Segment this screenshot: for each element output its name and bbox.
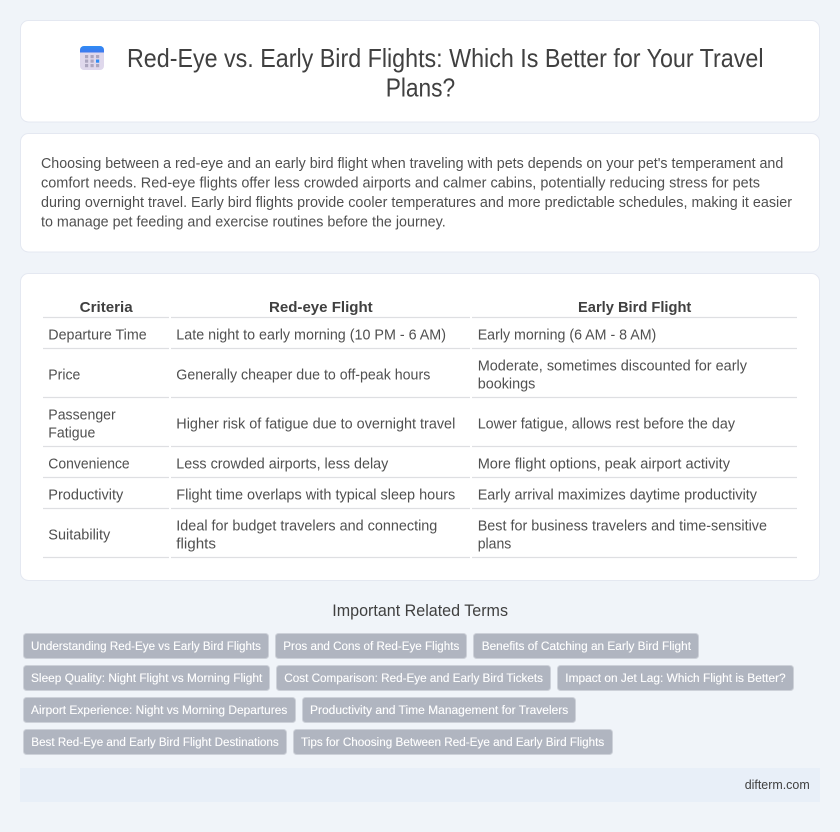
row: departure time: Late night to early morning (10 PM - 6 AM)	[176, 327, 446, 343]
row: passenger fatigue: Fatigue	[48, 425, 95, 441]
row: passenger fatigue	[48, 407, 736, 441]
row: productivity: Flight time overlaps with typical sleep hours	[176, 487, 455, 503]
row: productivity	[48, 487, 758, 503]
row: suitability: plans	[478, 536, 511, 552]
tag: Benefits of Catching an Early Bird Flight	[482, 639, 692, 653]
row: passenger fatigue: Higher risk of fatigue due to overnight travel	[176, 416, 455, 432]
row: suitability: Ideal for budget travelers and connecting	[176, 518, 437, 534]
table header: Early Bird Flight	[578, 299, 691, 316]
row: suitability	[48, 518, 767, 552]
text block: intro paragraph: to manage pet feeding and exercise routines before the journey.	[41, 215, 446, 231]
table header: Criteria	[80, 299, 133, 316]
row: price: Generally cheaper due to off-peak hours	[176, 367, 430, 383]
tag	[294, 730, 612, 754]
row: price: Moderate, sometimes discounted for early	[478, 358, 748, 374]
panel: comparison table	[20, 274, 820, 580]
text block: intro paragraph: during overnight travel. Early bird flights provide cooler temperatures and more predictable schedules, making it easier	[41, 195, 792, 211]
tag	[276, 634, 466, 658]
tag: Airport Experience: Night vs Morning Departures	[31, 703, 287, 717]
row: productivity: Productivity	[48, 487, 124, 503]
tag	[474, 634, 698, 658]
tag	[302, 698, 576, 722]
tag: Understanding Red-Eye vs Early Bird Flights	[31, 639, 261, 653]
row: suitability: Best for business travelers and time-sensitive	[478, 518, 767, 534]
tag	[24, 666, 270, 690]
text block: intro paragraph: Choosing between a red-eye and an early bird flight when traveling with pets depends on your pet's temperament and	[41, 156, 783, 172]
title: Plans?	[386, 74, 455, 102]
row: convenience: More flight options, peak airport activity	[478, 456, 731, 472]
row: convenience	[48, 456, 731, 472]
row: convenience: Convenience	[48, 456, 130, 472]
row: suitability: flights	[176, 536, 216, 552]
row: price: bookings	[478, 376, 535, 392]
tag	[24, 730, 286, 754]
row: suitability: Suitability	[48, 527, 111, 543]
tag: Impact on Jet Lag: Which Flight is Better?	[565, 671, 786, 685]
tag	[24, 634, 268, 658]
row: departure time: Early morning (6 AM - 8 AM)	[478, 327, 656, 343]
row: passenger fatigue: Passenger	[48, 407, 116, 423]
panel: title header	[20, 20, 820, 122]
heading: important related terms: Important Related Terms	[332, 602, 508, 620]
row: passenger fatigue: Lower fatigue, allows rest before the day	[478, 416, 736, 432]
title: Red-Eye vs. Early Bird Flights: Which Is Better for Your Travel	[127, 45, 764, 73]
tag: Sleep Quality: Night Flight vs Morning Flight	[31, 671, 263, 685]
panel: introduction	[20, 134, 820, 252]
row: productivity: Early arrival maximizes daytime productivity	[478, 487, 758, 503]
tag	[558, 666, 794, 690]
tag	[24, 698, 296, 722]
row: departure time	[48, 327, 656, 343]
row: price: Price	[48, 367, 80, 383]
tag: Best Red-Eye and Early Bird Flight Destinations	[31, 735, 279, 749]
table header: Red-eye Flight	[269, 299, 373, 316]
tag	[276, 666, 550, 690]
row: departure time: Departure Time	[48, 327, 147, 343]
footer: difterm.com	[745, 777, 810, 792]
tag: Tips for Choosing Between Red-Eye and Early Bird Flights	[301, 735, 604, 749]
panel: related term tags	[24, 634, 794, 754]
text block: intro paragraph	[41, 156, 792, 231]
icon: calendar	[80, 46, 104, 70]
text block: intro paragraph: comfort needs. Red-eye flights offer less crowded airports and calmer cabins, potentially reducing stress for pets	[41, 175, 760, 191]
row: price	[48, 358, 748, 392]
row: convenience: Less crowded airports, less delay	[176, 456, 389, 472]
tag: Pros and Cons of Red-Eye Flights	[283, 639, 459, 653]
tag: Productivity and Time Management for Travelers	[310, 703, 568, 717]
title	[127, 45, 764, 102]
table header	[80, 299, 691, 316]
tag: Cost Comparison: Red-Eye and Early Bird Tickets	[284, 671, 543, 685]
footer	[20, 768, 820, 802]
